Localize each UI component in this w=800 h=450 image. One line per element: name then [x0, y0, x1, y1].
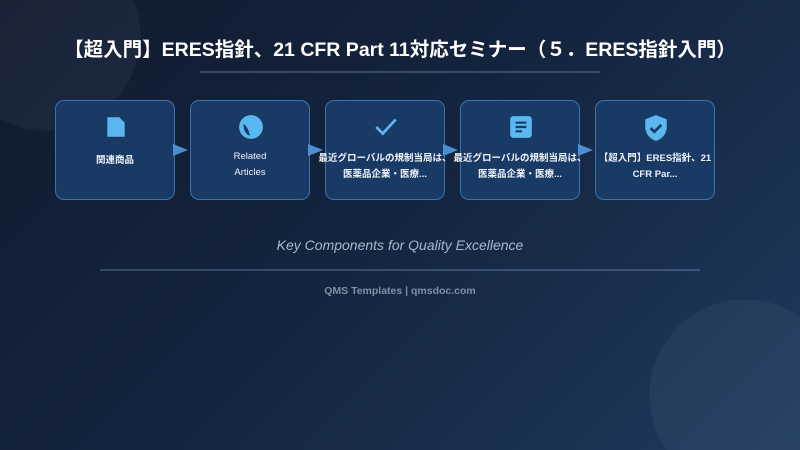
footer: QMS Templates | qmsdoc.com	[324, 285, 476, 297]
icon: document	[107, 117, 125, 137]
panel: check	[325, 100, 445, 200]
panel: Related Articles	[190, 100, 310, 200]
panel: shield	[595, 100, 715, 200]
label: 医薬品企業・医療...	[343, 169, 427, 180]
subtitle: Key Components for Quality Excellence	[277, 237, 523, 253]
label	[318, 152, 451, 180]
arrow	[578, 144, 593, 156]
title: 【超入門】ERES指針、21 CFR Part 11対応セミナー（５．ERES指針入門）	[64, 39, 736, 61]
label: 【超入門】ERES指針、21	[599, 153, 711, 164]
label	[234, 151, 266, 178]
panel: 関連商品	[55, 100, 175, 200]
label	[599, 152, 711, 180]
label: Articles	[234, 167, 266, 178]
icon: check	[375, 118, 397, 136]
label: 最近グローバルの規制当局は、	[319, 153, 451, 164]
arrow	[308, 144, 323, 156]
label: 最近グローバルの規制当局は、	[454, 153, 586, 164]
icon: globe	[239, 115, 263, 139]
label	[454, 152, 586, 180]
icon: list	[510, 116, 532, 138]
arrow	[173, 144, 188, 156]
arrow	[443, 144, 458, 156]
label: Related	[234, 151, 266, 162]
icon: shield	[645, 115, 667, 141]
label: CFR Par...	[633, 169, 677, 180]
label: 医薬品企業・医療...	[478, 169, 562, 180]
label: 関連商品	[96, 155, 134, 166]
panel: list	[460, 100, 580, 200]
